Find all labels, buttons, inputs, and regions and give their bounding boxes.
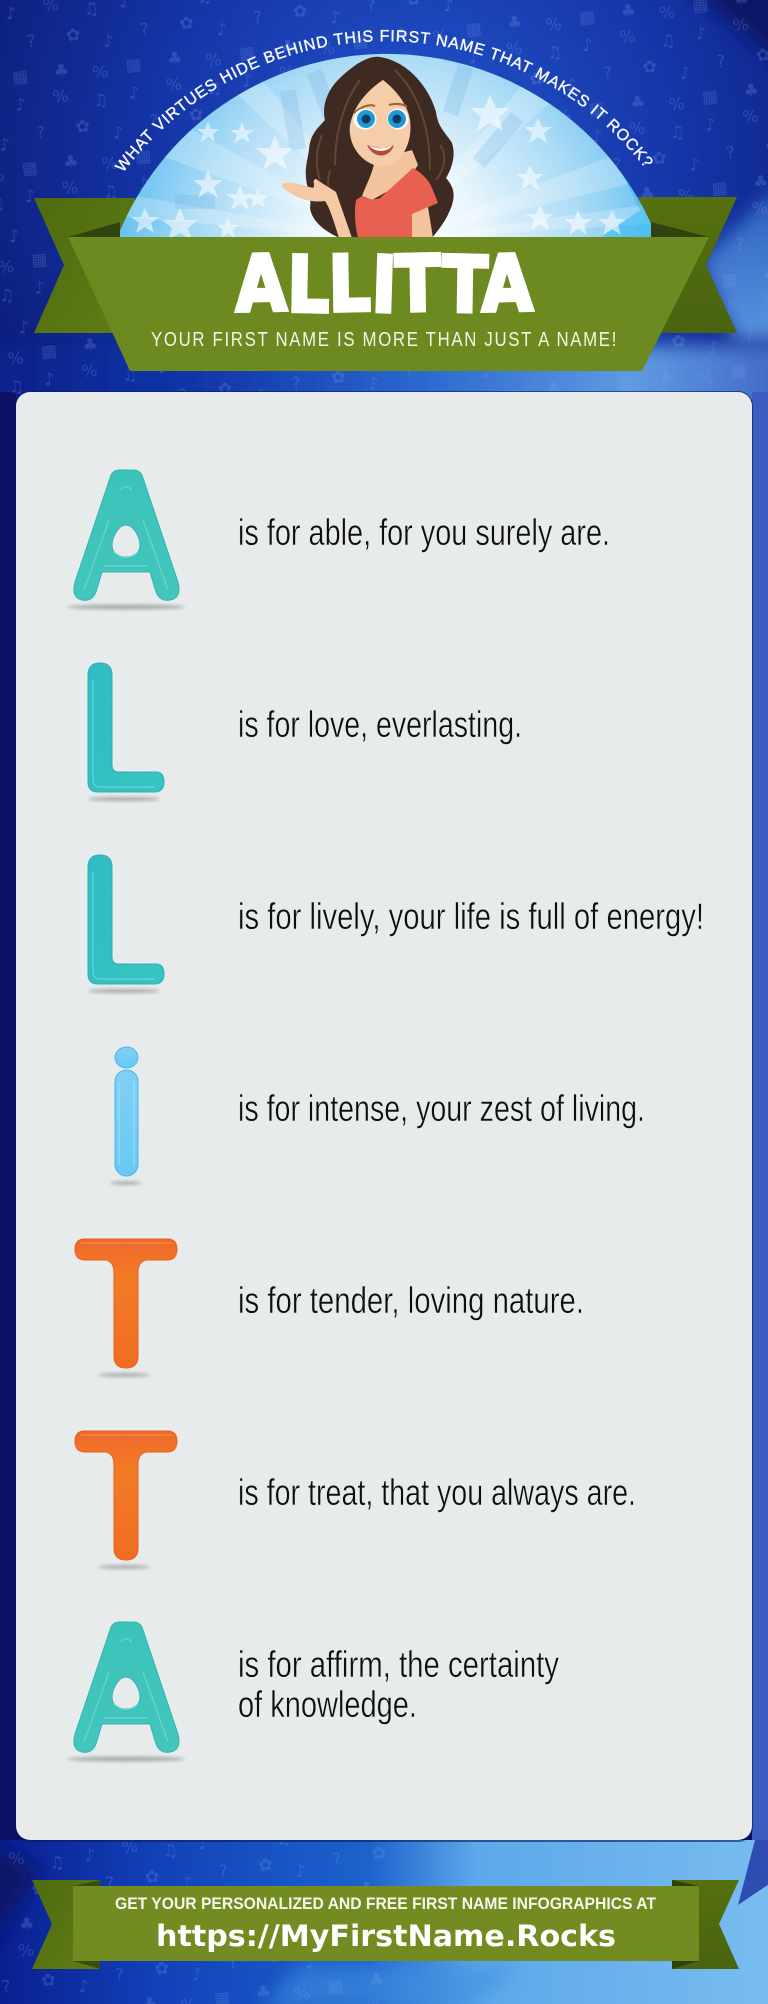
letter A	[67, 470, 185, 610]
back ribbon left tail	[34, 198, 135, 333]
row 2: L	[88, 663, 522, 801]
eyes	[354, 108, 408, 130]
row 7: A	[67, 1622, 559, 1762]
row 5: T	[75, 1239, 584, 1377]
url: https://MyFirstName.Rocks	[156, 1919, 616, 1953]
text	[238, 1643, 559, 1725]
sunburst dome	[120, 54, 651, 237]
row 3: L	[88, 855, 704, 993]
right arm	[412, 207, 433, 238]
subtitle: YOUR FIRST NAME IS MORE THAN JUST A NAME!	[151, 329, 618, 351]
left tail	[32, 1880, 100, 1969]
text: is for intense, your zest of living.	[238, 1087, 645, 1129]
red shirt	[355, 168, 438, 238]
hair	[306, 57, 454, 238]
footer line: GET YOUR PERSONALIZED AND FREE FIRST NAME INFOGRAPHICS AT	[115, 1894, 657, 1913]
panel: acrostic	[15, 391, 753, 1842]
title: ALLITTA: ALLITTA	[235, 240, 534, 331]
letter A	[67, 1622, 185, 1762]
main green banner	[68, 237, 709, 371]
letter i	[110, 1047, 142, 1185]
text: is for affirm, the certainty	[238, 1643, 559, 1685]
smile	[367, 145, 394, 156]
right tail	[672, 1880, 739, 1969]
neck and chest	[362, 150, 418, 200]
left arm and hand	[282, 179, 352, 238]
text: is for love, everlasting.	[238, 703, 522, 745]
letter T	[75, 1239, 177, 1377]
letter L	[88, 855, 164, 993]
text: is for treat, that you always are.	[238, 1471, 636, 1513]
footer ribbon	[32, 1880, 739, 1969]
text: of knowledge.	[238, 1683, 417, 1725]
ribbon folds	[68, 222, 709, 237]
row 6: T	[75, 1431, 636, 1569]
back ribbon right tail	[637, 197, 737, 333]
character: smiling woman	[282, 57, 454, 238]
text: is for tender, loving nature.	[238, 1279, 584, 1321]
row 4: i	[110, 1047, 645, 1185]
letter L	[88, 663, 164, 801]
footer banner	[73, 1886, 699, 1961]
letter T	[75, 1431, 177, 1569]
arc tagline: WHAT VIRTUES HIDE BEHIND THIS FIRST NAME THAT MAKES IT ROCK?	[114, 30, 653, 171]
row 1: A	[67, 470, 610, 610]
face	[350, 80, 410, 166]
eyebrows	[354, 104, 407, 113]
text: is for able, for you surely are.	[238, 511, 610, 553]
